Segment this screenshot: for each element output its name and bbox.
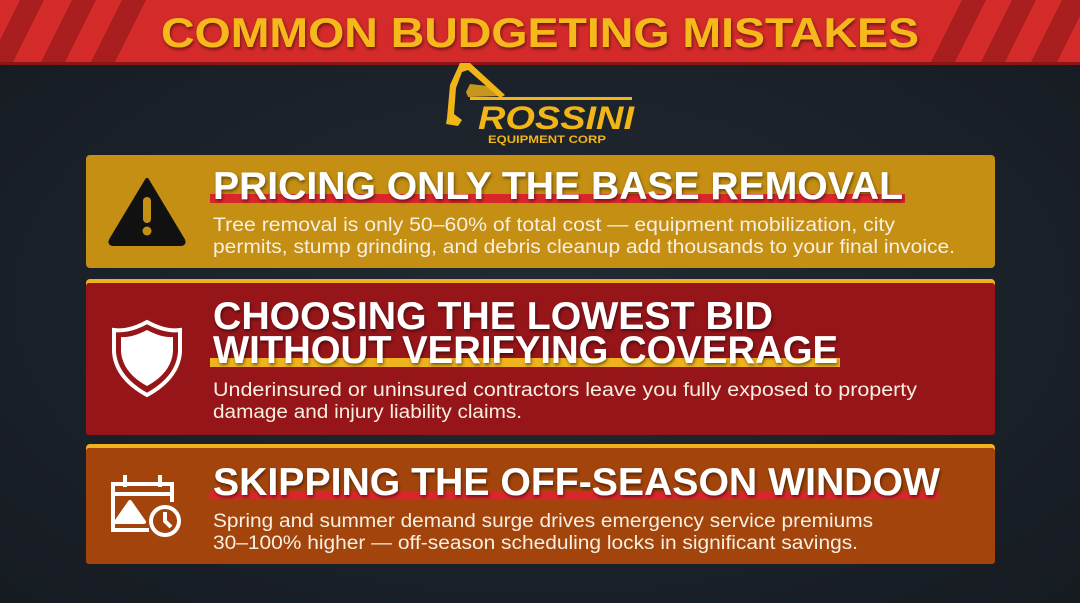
heading: WITHOUT VERIFYING COVERAGE [213, 329, 838, 372]
panel 2: choosing the lowest bid [86, 279, 995, 435]
icon: calendar with warning and clock [113, 475, 179, 535]
icon: shield [114, 322, 180, 395]
panel 1: pricing only the base removal [86, 155, 995, 268]
heading [210, 295, 840, 372]
body text: Spring and summer demand surge drives emergency service premiums [213, 511, 873, 532]
heading: SKIPPING THE OFF-SEASON WINDOW [213, 461, 940, 504]
panel 3: skipping the off-season window [86, 444, 995, 564]
title: COMMON BUDGETING MISTAKES [161, 9, 919, 56]
body text: damage and injury liability claims. [213, 402, 522, 423]
logo [446, 63, 635, 146]
body text [213, 511, 873, 554]
body text: Tree removal is only 50–60% of total cost — equipment mobilization, city [213, 215, 896, 236]
heading: PRICING ONLY THE BASE REMOVAL [213, 165, 903, 208]
body text [213, 215, 955, 258]
icon: warning triangle [110, 180, 184, 244]
body text: 30–100% higher — off-season scheduling locks in significant savings. [213, 533, 858, 554]
body text [213, 380, 918, 423]
heading: CHOOSING THE LOWEST BID [213, 295, 773, 338]
body text: Underinsured or uninsured contractors leave you fully exposed to property [213, 380, 918, 401]
logo: EQUIPMENT CORP [488, 134, 606, 146]
logo: ROSSINI [478, 100, 635, 136]
body text: permits, stump grinding, and debris cleanup add thousands to your final invoice. [213, 237, 955, 258]
header banner [0, 0, 1080, 65]
